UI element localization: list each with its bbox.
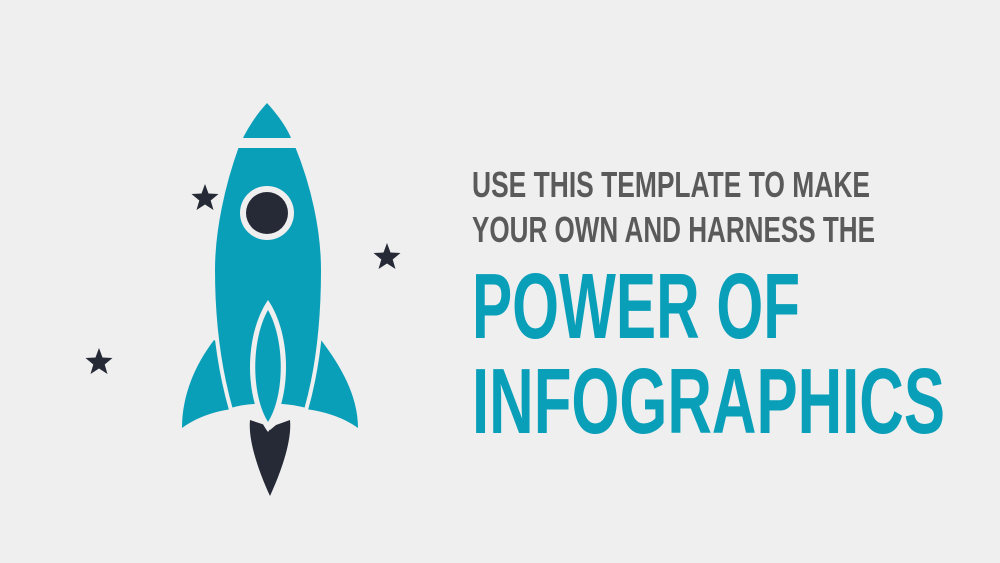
rocket right fin bbox=[297, 340, 358, 428]
headline bbox=[472, 254, 945, 453]
rocket body bbox=[213, 146, 323, 410]
subtitle text bbox=[472, 164, 875, 250]
rocket center fin bbox=[250, 300, 286, 432]
rocket window bbox=[240, 186, 294, 240]
subtitle text: USE THIS TEMPLATE TO MAKE bbox=[472, 164, 870, 205]
rocket flame bbox=[250, 420, 290, 496]
icon: star 1 bbox=[192, 184, 218, 210]
rocket nose cone bbox=[243, 103, 291, 138]
headline: POWER OF bbox=[472, 254, 800, 358]
rocket left fin bbox=[182, 340, 240, 428]
icon: star 2 bbox=[374, 243, 400, 269]
icon: rocket bbox=[182, 103, 358, 496]
icon: star 3 bbox=[86, 348, 112, 374]
